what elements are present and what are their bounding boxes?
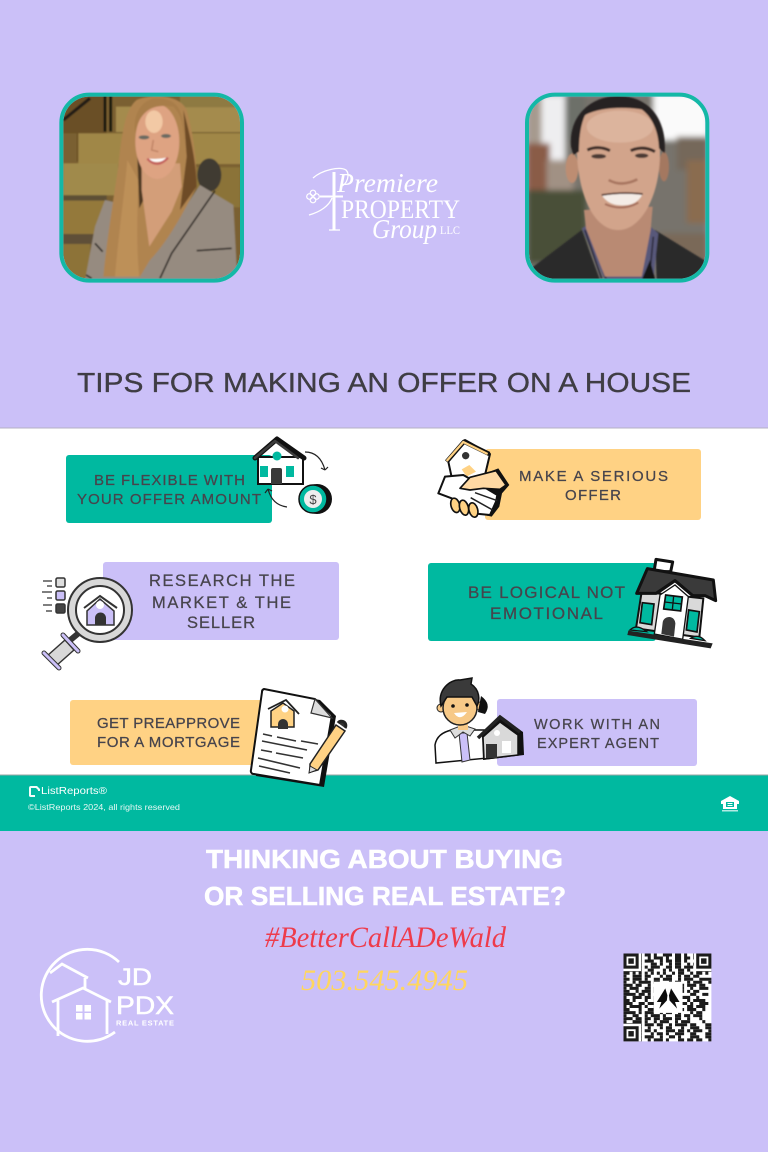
tip 2 text: RESEARCH THE [149, 572, 295, 590]
icon: handshake with house [438, 440, 509, 518]
QR finder squares [624, 954, 711, 1041]
title: TIPS FOR MAKING AN OFFER ON A HOUSE [77, 367, 691, 398]
tip 3: preapproval [70, 689, 346, 787]
logo house mark [41, 949, 119, 1041]
tip 4 text: MAKE A SERIOUS [519, 468, 668, 485]
tip 4 box [485, 449, 701, 520]
tip 6 text: WORK WITH AN [534, 717, 660, 733]
logo: Premiere Property Group [307, 168, 460, 244]
tip 1 text: BE FLEXIBLE WITH [94, 472, 245, 489]
tip 2: research [42, 562, 339, 668]
logo key and swash [307, 168, 348, 230]
icon: house and coin [255, 439, 332, 514]
tip 3 text: GET PREAPPROVE [97, 715, 240, 732]
phone number: 503.545.4945 [301, 964, 468, 997]
tip 4: serious offer [438, 440, 701, 520]
icon: agent with house [435, 678, 524, 763]
icon: house and coin: $ [309, 492, 317, 507]
call to action heading: THINKING ABOUT BUYING [206, 844, 563, 874]
tip 1 box [66, 455, 272, 523]
tip 3 text [97, 715, 240, 751]
tip 5 box [428, 563, 656, 641]
tip 1 text: YOUR OFFER AMOUNT [77, 491, 261, 508]
tip 2 box [103, 562, 339, 640]
logo: Premiere Property Group: PROPERTY [341, 195, 460, 224]
tip 2 text [149, 572, 295, 632]
call to action heading [204, 844, 566, 911]
tip 3 box [70, 700, 270, 765]
logo wordmark: REAL ESTATE [116, 1018, 174, 1028]
tip 2 text: MARKET & THE [152, 594, 291, 612]
tip 1 text [77, 472, 261, 508]
logo: JD PDX Real Estate [41, 949, 174, 1041]
icon: equal housing [721, 796, 739, 812]
tip 2 text: SELLER [187, 614, 255, 632]
tip 5 text: EMOTIONAL [490, 604, 603, 623]
tip 4 text: OFFER [565, 487, 621, 504]
tip 6 text: EXPERT AGENT [537, 736, 659, 752]
icon: tilted house [627, 559, 716, 648]
tip 6: expert agent [435, 678, 697, 766]
photo: man agent [527, 93, 708, 283]
hashtag: #BetterCallADeWald [265, 921, 507, 954]
logo: Premiere Property Group: Premiere [336, 168, 438, 198]
logo wordmark: JD [118, 964, 152, 991]
logo: Premiere Property Group: LLC [440, 223, 460, 237]
tip 5: logical [428, 559, 716, 648]
photo: woman agent [60, 93, 243, 283]
tip 3 text: FOR A MORTGAGE [97, 734, 240, 751]
call to action heading: OR SELLING REAL ESTATE? [204, 881, 566, 911]
QR centre logo [654, 982, 683, 1013]
tip 5 text [468, 583, 625, 623]
panel: teal footer band [0, 774, 768, 831]
QR code [624, 954, 711, 1041]
tip 4 text [519, 468, 668, 504]
tip 6 box [497, 699, 697, 766]
tip 1: be flexible [66, 439, 332, 523]
tip 6 text [534, 717, 660, 752]
logo wordmark [116, 964, 174, 1028]
logo wordmark: PDX [116, 992, 174, 1020]
panel: white tips area [0, 428, 768, 775]
footer copyright: ©ListReports 2024, all rights reserved [28, 802, 180, 812]
tip 5 text: BE LOGICAL NOT [468, 583, 625, 602]
footer ListReports logo: ListReports® [41, 785, 107, 797]
icon: document and pen [251, 689, 346, 787]
logo: Premiere Property Group: Group [372, 214, 437, 244]
icon: magnifying glass [42, 578, 132, 668]
